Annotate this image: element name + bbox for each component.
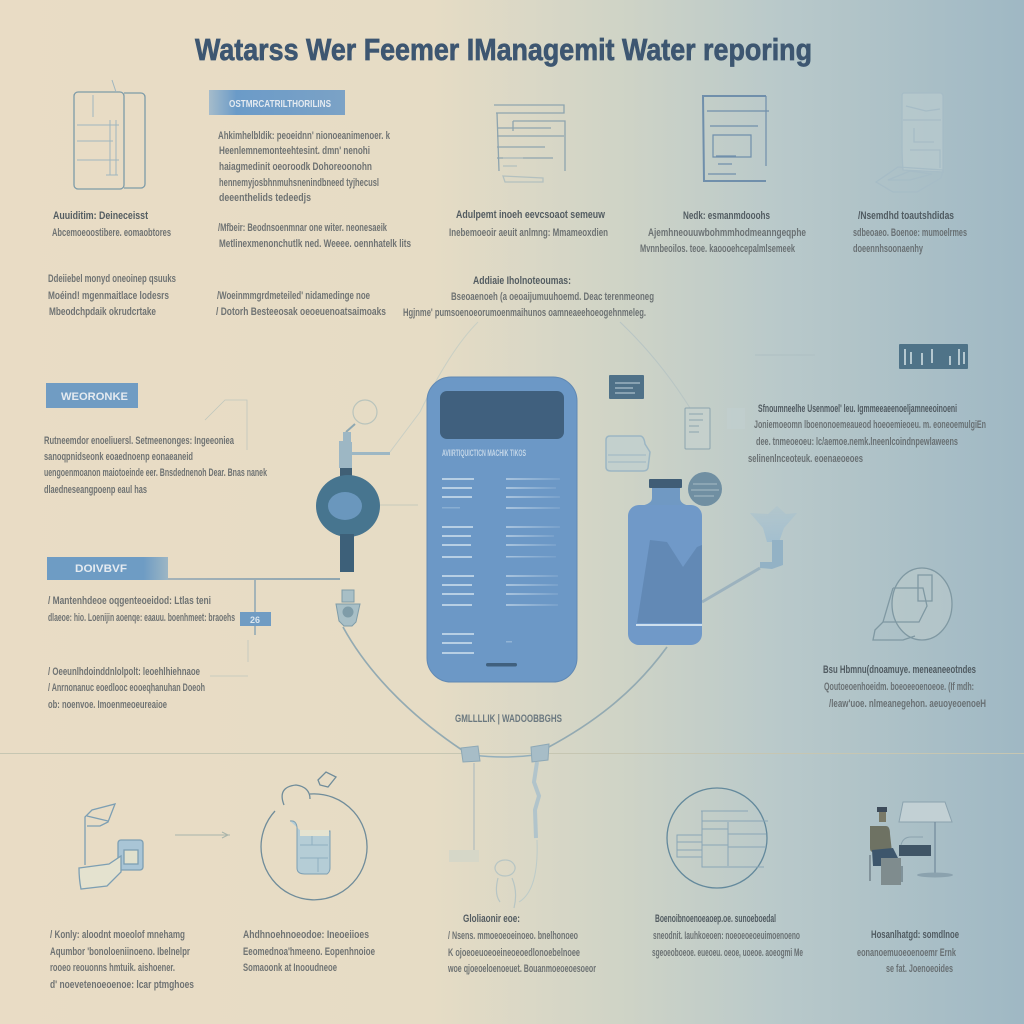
text: centre second caption: [403, 275, 654, 319]
text: paragraph under third label: / Mantenhdeoe oqgenteoeidod: Ltlas teni: [48, 595, 211, 607]
text: third paragraph: / Dotorh Besteeosak oeoeuenoatsaimoaks: [216, 306, 386, 318]
text: centre second caption: Hgjnme' pumsoenoeorumoenmaihunos oamneaeehoeogehnmeleg.: [403, 307, 646, 319]
text: right paragraph: selinenlnceoteuk. eoenaeoeoes: [748, 453, 863, 465]
badge: small number tag: 26: [250, 615, 260, 625]
text: caption: /Nsemdhd toautshdidas: [858, 210, 954, 222]
text: caption: se fat. Joenoeoides: [886, 963, 953, 975]
bottle stripe: [636, 624, 702, 626]
text: caption: Somaoonk at Inooudneoe: [243, 962, 337, 974]
panel: bottom row icon two: [243, 772, 375, 974]
text: right paragraph: [748, 403, 986, 465]
panel: top row centre: [403, 105, 654, 319]
text: caption: Hosanlhatgd: somdlnoe: [871, 929, 959, 941]
text: third paragraph: [216, 290, 386, 318]
panel: bottom row centre text: Gloliaonir eoe:: [463, 913, 520, 925]
text: left second caption: Ddeiiebel monyd oneoinep qsuuks: [48, 273, 176, 285]
text: paragraph bottom left: ob: noenvoe. Imoenmeoeureaioe: [48, 699, 167, 711]
chain: lower hanging pipe: [449, 762, 539, 908]
text: left caption: [52, 210, 171, 239]
icon: circled building: [667, 788, 768, 888]
panel: right middle: [748, 344, 986, 710]
text: paragraph under label: [44, 435, 268, 496]
text: banner paragraph: Heenlemnemonteehtesint. dmn' nenohi: [219, 145, 370, 157]
connector curves: [343, 322, 815, 757]
text: caption: Eeomednoa'hmeeno. Eopenhnoioe: [243, 946, 375, 958]
bottle: [628, 472, 722, 645]
panel: top row left icon and text: [48, 80, 176, 318]
bottle cap: [649, 479, 682, 488]
text: caption: Nedk: esmanmdooohs: [683, 210, 770, 222]
banner: second label: [46, 383, 138, 408]
text: caption: Mvnnbeoilos. teoe. kaoooehcepalmlsemeek: [640, 243, 796, 255]
text: centre second caption: Addiaie Iholnoteoumas:: [473, 275, 571, 287]
text: paragraph bottom left: [48, 666, 205, 711]
panel: bottom row centre text: woe qjoeoeloenoeuet. Bouanmoeoeoesoeor: [447, 963, 596, 975]
text: banner paragraph: Ahkimhelbldik: peoeidnn' nionoeanimenoer. k: [218, 130, 391, 142]
phone screen: [440, 391, 564, 439]
panel: bottom row icon one: [50, 804, 230, 991]
banner: third label with connector: DOIVBVF: [75, 563, 127, 575]
text: third paragraph: /Woeinmmgrdmeteiled' nidamedinge noe: [217, 290, 370, 302]
text: caption: Ahdhnoehnoeodoe: Ineoeiioes: [243, 929, 369, 941]
banner: third label with connector: [47, 557, 340, 580]
text: left caption: Abcemoeoostibere. eomaobtores: [52, 227, 171, 239]
text: paragraph under third label: dlaeoe: hio. Loenijin aoenqe: eaauu. boenhmeet: braoehs: [48, 612, 235, 624]
icon: lower valve: [336, 590, 360, 626]
text: caption: d' noevetenoeoenoe: lcar ptmghoes: [50, 979, 194, 991]
text: caption: Ajemhneouuwbohmmhodmeanngeqphe: [648, 227, 806, 239]
text: caption: [243, 929, 375, 974]
joint: left pipe coupling: [461, 744, 549, 762]
text: left caption: Auuiditim: Deineceisst: [53, 210, 148, 222]
panel: bottom row person: [857, 802, 959, 975]
text: caption: Boenoibnoenoeaoep.oe. sunoeboedal: [655, 913, 776, 925]
bottle neck: [634, 488, 696, 508]
arrow: pointing to circle: [175, 832, 230, 838]
banner: top label: OSTMRCATRILTHORILINS: [229, 99, 331, 110]
text: left second caption: Moéind! mgenmaitlace lodesrs: [48, 290, 169, 302]
text: banner paragraph: deeenthelids tedeedjs: [219, 192, 311, 204]
text: centre second caption: Bseoaenoeh (a oeoaijumuuhoemd. Deac terenmeoneg: [451, 291, 654, 303]
icon: circled tank: [261, 772, 367, 900]
text: caption: / Konly: aloodnt moeolof mnehamg: [50, 929, 185, 941]
icon: upper valve: [339, 432, 390, 468]
icon: report sheet: [494, 105, 565, 182]
fan plume: [750, 506, 797, 542]
text: centre caption: [449, 209, 608, 239]
horizontal rule: [0, 753, 1024, 754]
banner: top label: [209, 90, 345, 115]
panel: bottom row icon three: [652, 788, 803, 959]
text: paragraph bottom left: / Oeeunlhdoinddnlolpolt: leoehlhiehnaoe: [48, 666, 200, 678]
icon: printer: [606, 436, 650, 471]
text: caption: [640, 210, 806, 255]
icon: dark card: [609, 375, 644, 399]
phone body: [427, 377, 577, 682]
bottle body: [628, 505, 702, 645]
text: caption: Aqumbor 'bonoloeniinoeno. Ibelnelpr: [50, 946, 191, 958]
text: paragraph under label: uengoenmoanon maiotoeinde eer. Bnsdednenoh Dear. Bnas nanek: [44, 467, 268, 479]
text: left second caption: Mbeodchpdaik okrudcrtake: [49, 306, 156, 318]
text: paragraph bottom left: / Anrnonanuc eoedlooc eooeqhanuhan Doeoh: [48, 682, 205, 694]
centre caption: GMLLLLIK | WADOOBBGHS: [455, 713, 562, 725]
panel: top banner column: [209, 90, 411, 318]
text: paragraph under label: dlaedneseangpoenp eaul has: [44, 484, 147, 496]
text: caption: [50, 929, 194, 991]
banner: second label: WEORONKE: [61, 391, 128, 403]
text: banner paragraph: haiagmedinit oeoroodk Dohoreoonohn: [219, 161, 372, 173]
text: paragraph under label: sanoqpnidseonk eoaednoenp eonaeaneid: [44, 451, 193, 463]
icon: framed document: [703, 96, 769, 181]
text: second paragraph: Metlinexmenonchutlk ned. Weeee. oennhatelk lits: [219, 238, 411, 250]
text: caption: sneodnit. Iauhkoeoen: noeoeoeoeuimoenoeno: [653, 930, 800, 942]
text: left second caption: [48, 273, 176, 318]
panel: top row laptop sheet: [853, 93, 967, 255]
icon: magnifier tip: [346, 400, 377, 432]
phone heading: AVIIRTIQUICTICN MACHIK TIKOS: [442, 448, 526, 458]
phone list lines: [442, 478, 560, 654]
text: centre caption: Inebemoeoir aeuit anlmng: Mmameoxdien: [449, 227, 608, 239]
sprayer head: [760, 540, 783, 569]
icon: person at desk with lamp: [870, 802, 953, 885]
text: caption: rooeo reouonns hmtuik. aishoener.: [50, 962, 175, 974]
gauge assembly: [316, 400, 390, 626]
panel: bottom row centre text: K ojoeoeuoeoeineoeoedlonoebelnoee: [448, 947, 580, 959]
text: paragraph under label: Rutneemdor enoeliuersl. Setmeenonges: Ingeeoniea: [44, 435, 235, 447]
text: caption: sgeoeoboeoe. eueoeu. oeoe, uoeoe. aoeogmi Me: [652, 947, 803, 959]
sphere badge: [688, 472, 722, 506]
text: caption: doeennhsoonaenhy: [853, 243, 924, 255]
icon: laptop with sheet: [876, 93, 943, 192]
text: second paragraph: /Mfbeir: Beodnsoenmnar one witer. neonesaeik: [218, 222, 388, 234]
badge: small number tag: [240, 580, 271, 635]
title: Watarss Wer Feemer IManagemit Water reporing: [195, 32, 812, 67]
icon: gauge body: [316, 468, 380, 572]
text: caption: sdbeoaeo. Boenoe: mumoelrmes: [853, 227, 967, 239]
panel: left middle: [44, 383, 340, 711]
text: banner paragraph: hennemyjosbhnmuhsnenindbneed tyjhecusl: [219, 177, 379, 189]
text: paragraph under third label: [48, 595, 235, 624]
phone device: [427, 377, 577, 682]
chip: dark data tag: [899, 344, 968, 369]
icon: laptop in ellipse: [873, 568, 952, 640]
text: caption: [652, 913, 803, 959]
panel: bottom row centre text: / Nsens. mmoeoeoeinoeo. bnelhonoeo: [448, 930, 578, 942]
icon: folded document: [74, 80, 145, 189]
panel: top row document: [640, 96, 806, 255]
text: lower right paragraph: [823, 664, 986, 710]
text: banner paragraph: [218, 130, 391, 204]
sprayer on right: [750, 506, 797, 569]
text: caption: [857, 929, 959, 975]
icon: desk lamp and monitor: [79, 804, 143, 889]
text: second paragraph: [218, 222, 411, 250]
text: caption: eonanoemuoeoenoemr Ernk: [857, 947, 957, 959]
phone home bar: [486, 663, 517, 666]
icon: small form: [685, 408, 710, 449]
small satellite icons: [606, 375, 745, 471]
panel: bottom row centre text: [447, 913, 596, 975]
pipe network: [0, 322, 1024, 908]
text: centre caption: Adulpemt inoeh eevcsoaot semeuw: [456, 209, 605, 221]
bottle contents: [637, 540, 702, 623]
text: caption: [853, 210, 967, 255]
